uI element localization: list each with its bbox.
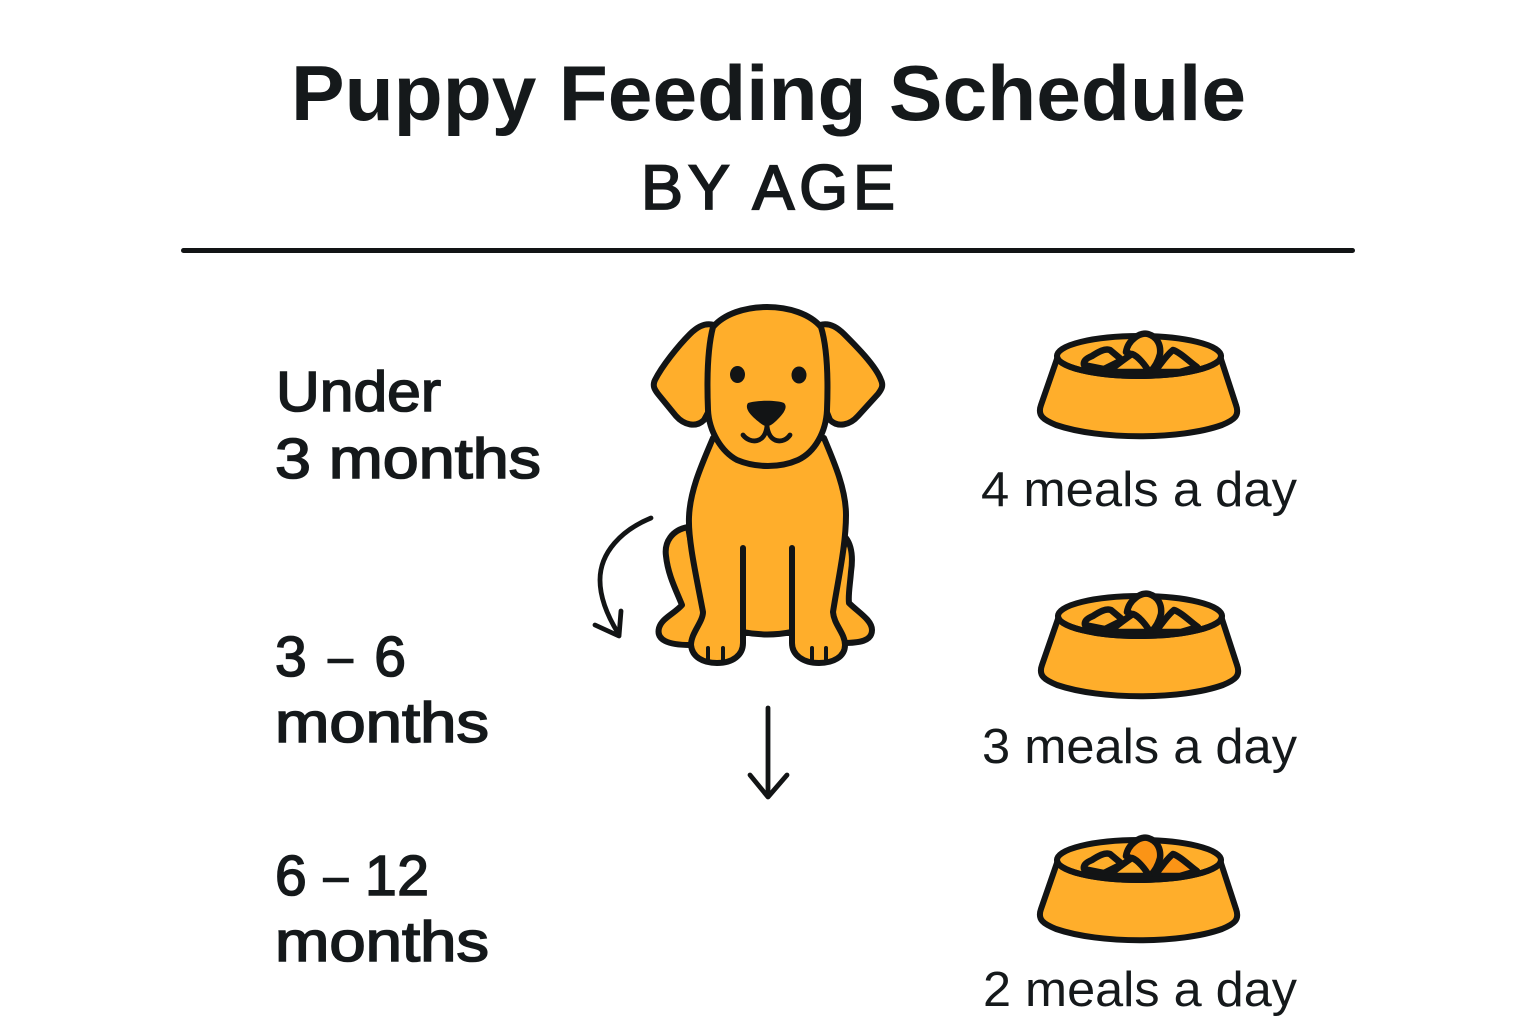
puppy left haunch bbox=[659, 527, 705, 645]
age label: under 3 months: 3 months bbox=[275, 427, 541, 491]
icon: food bowl 4 meals bbox=[1040, 334, 1237, 436]
age label: 3 to 6 months: – bbox=[328, 633, 353, 682]
puppy front legs bbox=[743, 548, 792, 632]
subtitle: BY AGE bbox=[641, 153, 895, 223]
title: Puppy Feeding Schedule bbox=[291, 49, 1246, 137]
age label: 6 to 12 months: months bbox=[275, 910, 489, 974]
age label: 6 to 12 months bbox=[275, 844, 489, 974]
text: 4 meals a day: 4 meals a day bbox=[981, 463, 1298, 517]
text: 2 meals a day: 2 meals a day bbox=[983, 963, 1298, 1017]
age label: 6 to 12 months: 12 bbox=[349, 844, 429, 908]
puppy body bbox=[689, 438, 846, 663]
puppy head bbox=[708, 307, 827, 466]
puppy right haunch bbox=[825, 538, 872, 643]
puppy nose bbox=[747, 401, 786, 426]
puppy eyes bbox=[730, 366, 806, 384]
age label: 6 to 12 months: – bbox=[324, 852, 349, 901]
age label: under 3 months bbox=[275, 360, 541, 491]
icon: food bowl 3 meals bbox=[1041, 594, 1238, 696]
puppy mouth bbox=[743, 426, 790, 441]
age label: 3 to 6 months: 3 bbox=[275, 625, 307, 689]
text: 3 meals a day: 3 meals a day bbox=[982, 720, 1298, 774]
icon: food bowl 2 meals bbox=[1040, 838, 1237, 940]
age label: 6 to 12 months: 6 bbox=[275, 844, 307, 908]
age label: 3 to 6 months: 6 bbox=[356, 625, 406, 689]
puppy right ear bbox=[820, 324, 882, 425]
age label: 3 to 6 months: months bbox=[275, 691, 489, 755]
arrow: down bbox=[750, 708, 787, 797]
puppy left ear bbox=[654, 324, 714, 425]
puppy toes bbox=[708, 648, 826, 660]
icon: sitting puppy bbox=[654, 307, 882, 663]
age label: 3 to 6 months bbox=[275, 625, 489, 755]
age label: under 3 months: Under bbox=[276, 360, 441, 424]
arrow: curved tail arrow bbox=[595, 518, 651, 636]
